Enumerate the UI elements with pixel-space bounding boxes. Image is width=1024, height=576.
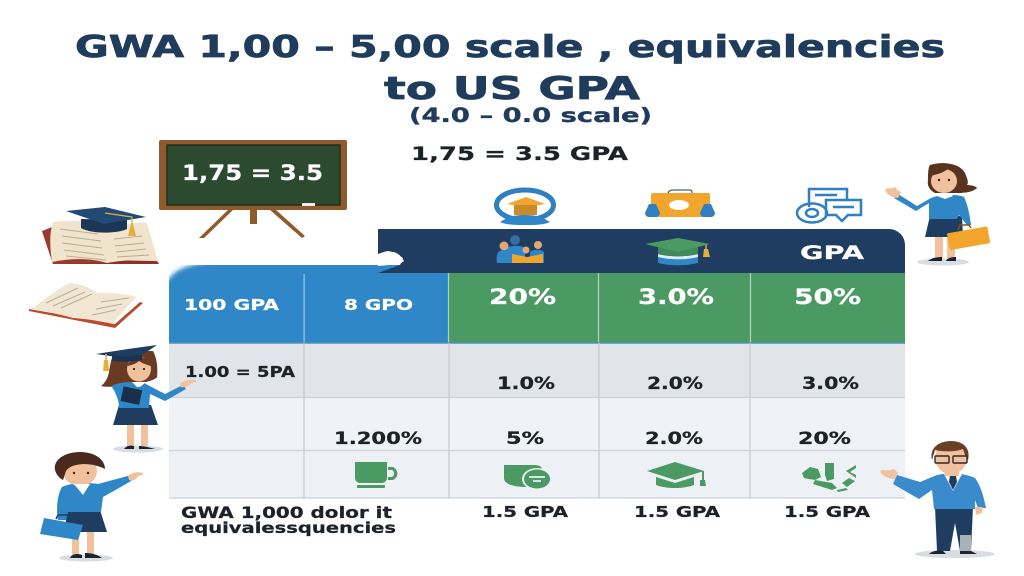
- row 2 values: 5%: [506, 429, 545, 448]
- icon: chalkboard: 1,75 = 3.5: [182, 161, 323, 185]
- icon: green mug: [355, 462, 397, 488]
- row 1 values: [185, 363, 860, 393]
- footer GPA values: 1.5 GPA: [784, 503, 870, 521]
- row 2 values: [334, 429, 852, 448]
- row 1 values: 1.00 = 5PA: [185, 363, 295, 381]
- icon: green shield badge: [504, 465, 552, 490]
- panel: green header cells: 3.0%: [638, 285, 714, 309]
- panel: table body rows: [169, 343, 905, 498]
- panel: navy header band: [378, 229, 905, 273]
- icon: group of students: [497, 235, 544, 263]
- character: man with glasses and tie: [880, 441, 995, 558]
- panel: green header cells: 20%: [489, 285, 556, 309]
- panel: blue header cells: 8 GPO: [344, 296, 413, 314]
- icon: green graduation cap on books: [645, 238, 710, 265]
- icon: documents and gear: [797, 189, 861, 222]
- icon: green graduation cap: [647, 462, 706, 488]
- footer GPA values: 1.5 GPA: [634, 503, 720, 521]
- title: [75, 30, 945, 107]
- icon: orange graduation badge: [496, 190, 554, 225]
- panel: blue header cells: 100 GPA: [184, 296, 279, 314]
- icon: open book with graduation cap: [42, 207, 159, 264]
- icon: orange briefcase: [645, 190, 715, 217]
- row 2 values: 20%: [798, 429, 852, 448]
- panel: green header cells: [448, 273, 905, 343]
- panel: blue header cells: [165, 261, 448, 343]
- row 1 values: 2.0%: [647, 374, 704, 393]
- panel: green header cells: 50%: [794, 285, 861, 309]
- table: [165, 229, 905, 498]
- icon: open book: [29, 283, 143, 328]
- row 2 values: 2.0%: [645, 429, 704, 448]
- row 2 values: 1.200%: [334, 429, 423, 448]
- row 1 values: 3.0%: [802, 374, 860, 393]
- footer note: equivalessquencies: [181, 519, 396, 537]
- subtitle: scale range: (4.0 – 0.0 scale): [409, 104, 652, 127]
- footer GPA values: 1.5 GPA: [482, 503, 568, 521]
- row 1 values: 1.0%: [497, 374, 556, 393]
- character: woman with orange bag, top right: [885, 163, 990, 266]
- footer note: [181, 503, 396, 537]
- title: GWA 1,00 – 5,00 scale , equivalencies: [75, 30, 945, 65]
- footer note: GWA 1,000 dolor it: [181, 503, 392, 522]
- icon: chalkboard: [159, 140, 347, 238]
- title: to US GPA: [384, 71, 640, 107]
- footer GPA values: [482, 503, 870, 521]
- icon: green tools: [802, 463, 856, 492]
- header label: GPA: GPA: [800, 243, 865, 264]
- equivalence statement: 1,75 = 3.5 GPA: [411, 144, 629, 165]
- character: woman with blue briefcase: [40, 452, 143, 562]
- character: woman with graduation cap: [96, 345, 196, 452]
